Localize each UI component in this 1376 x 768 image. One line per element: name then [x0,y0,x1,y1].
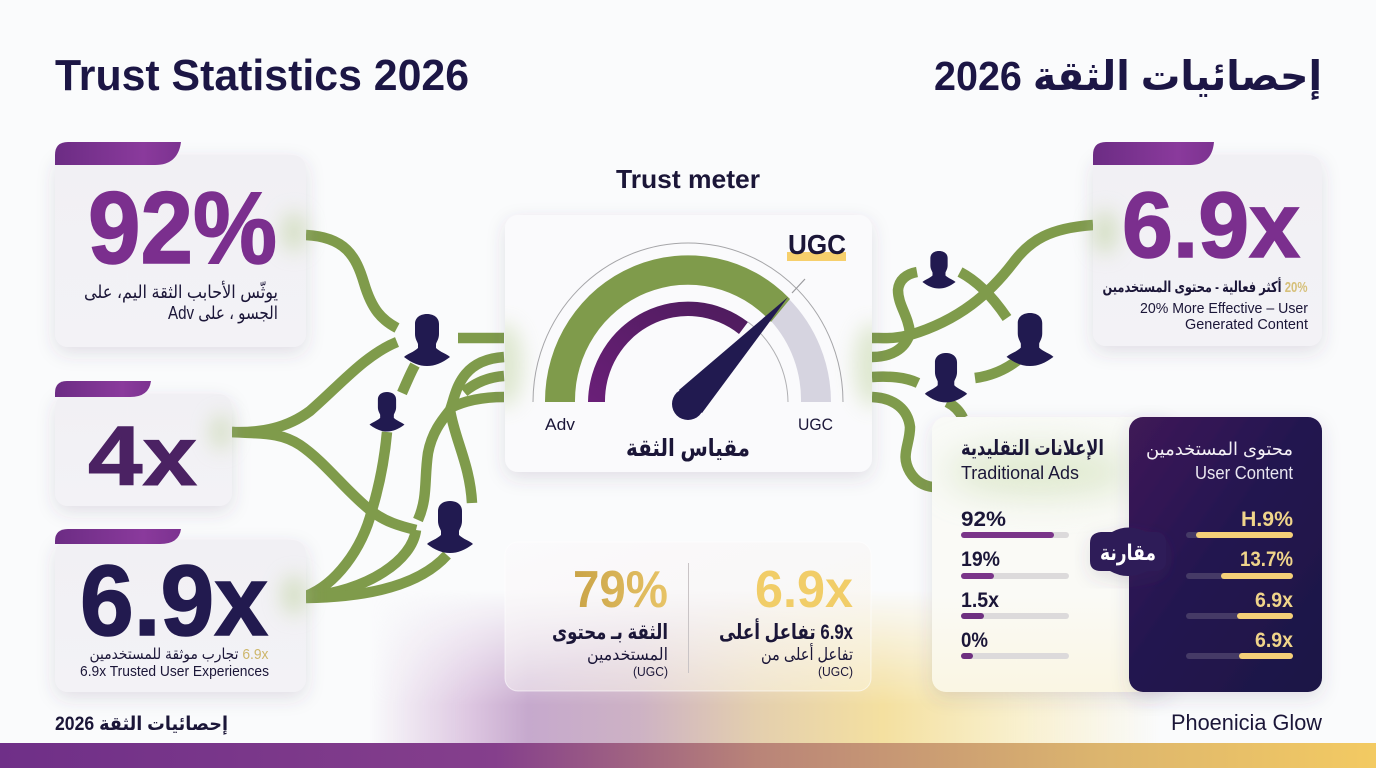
tab [55,142,181,165]
title: english: Trust Statistics 2026 [55,51,469,100]
row H.9% [1186,508,1293,538]
caption: users: المستخدمين [587,645,668,664]
user content side [1129,417,1322,692]
arabic caption: يوثّس الأحابب الثقة اليم، على [84,281,278,303]
row H.9%: H.9% [1241,508,1293,531]
icon: person 5 [1007,313,1053,366]
label: Adv: Adv [545,415,576,434]
footer: brand: Phoenicia Glow [1171,710,1322,735]
row 6.9x [1186,589,1293,619]
row 1.5x [961,589,1069,619]
inner thin arc [748,322,788,402]
caption second line: الجسو ، على Adv [168,303,278,324]
tab [55,381,151,397]
row 19% [961,548,1069,579]
needle [672,279,805,420]
value: 79%: 79% [573,561,668,619]
panel: 92% stat [55,142,306,347]
traditional ads side [932,417,1172,692]
heading english: Traditional Ads [961,463,1079,483]
arabic caption: 20% أكثر فعالية - محتوى المستخدمين [1102,277,1308,296]
connector network: left [232,235,504,598]
purple arc segment [588,302,748,402]
panel: bottom stats [505,542,871,691]
value: 4x [88,409,197,503]
heading english: User Content [1195,463,1293,483]
bottom gradient bar [0,743,1376,768]
panel: gauge [487,215,890,472]
heading arabic: الإعلانات التقليدية [961,437,1104,460]
row 6.9x second: 6.9x [1255,629,1293,652]
gray arc segment [771,299,831,402]
heading arabic: محتوى المستخدمين [1146,439,1293,460]
panel: 6.9x trusted experiences [55,529,306,692]
icon: person 1 [404,314,450,366]
icon: person 6 [925,353,967,402]
icon: person 3 [427,501,473,553]
footer: arabic label: إحصائيات الثقة 2026 [55,714,228,735]
caption: UGC: (UGC) [633,664,668,679]
badge: comparison [1090,528,1166,576]
badge: comparison: مقارنة [1100,540,1156,565]
value: 6.9x [80,545,268,657]
row 92%: 92% [961,508,1006,531]
row 0%: 0% [961,629,988,652]
connector network: right [872,225,1093,487]
green arc segment [545,255,790,402]
english caption: 6.9x Trusted User Experiences [80,663,269,680]
panel: 4x stat [55,381,232,506]
caption: UGC right: (UGC) [818,664,853,679]
caption: higher engagement: 6.9x تفاعل أعلى [719,617,853,644]
value: 6.9x: 6.9x [755,561,853,619]
icon: person 2 [370,392,404,432]
arabic gauge title: مقياس الثقة [626,435,750,462]
panel: 6.9x more effective [1093,142,1322,346]
row 6.9x: 6.9x [1255,589,1293,612]
divider [688,563,689,673]
english caption line 1: 20% More Effective – User [1140,300,1308,317]
row 13.7% [1186,548,1293,579]
caption: trust in content: الثقة بـ محتوى [552,621,668,644]
value: 92% [88,171,277,285]
value: 6.9x [1122,173,1300,277]
UGC highlight label: UGC [788,229,846,260]
tab [1093,142,1214,165]
row 0% [961,629,1069,659]
tab [55,529,181,544]
arabic caption: 6.9x تجارب موثقة للمستخدمين [90,646,269,663]
panel: comparison [932,417,1322,692]
english caption line 2: Generated Content [1185,316,1309,333]
row 19%: 19% [961,548,1000,571]
outer thin arc [533,243,843,402]
background glow [384,600,1138,743]
icon: person 4 [922,251,956,288]
title: arabic: إحصائيات الثقة 2026 [934,53,1322,101]
row 1.5x: 1.5x [961,589,999,612]
heading: trust meter: Trust meter [616,164,760,194]
row 13.7%: 13.7% [1240,548,1293,571]
row 92% [961,508,1069,538]
caption: higher than: تفاعل أعلى من [761,643,853,664]
row 6.9x second [1186,629,1293,659]
label: UGC: UGC [798,415,833,434]
